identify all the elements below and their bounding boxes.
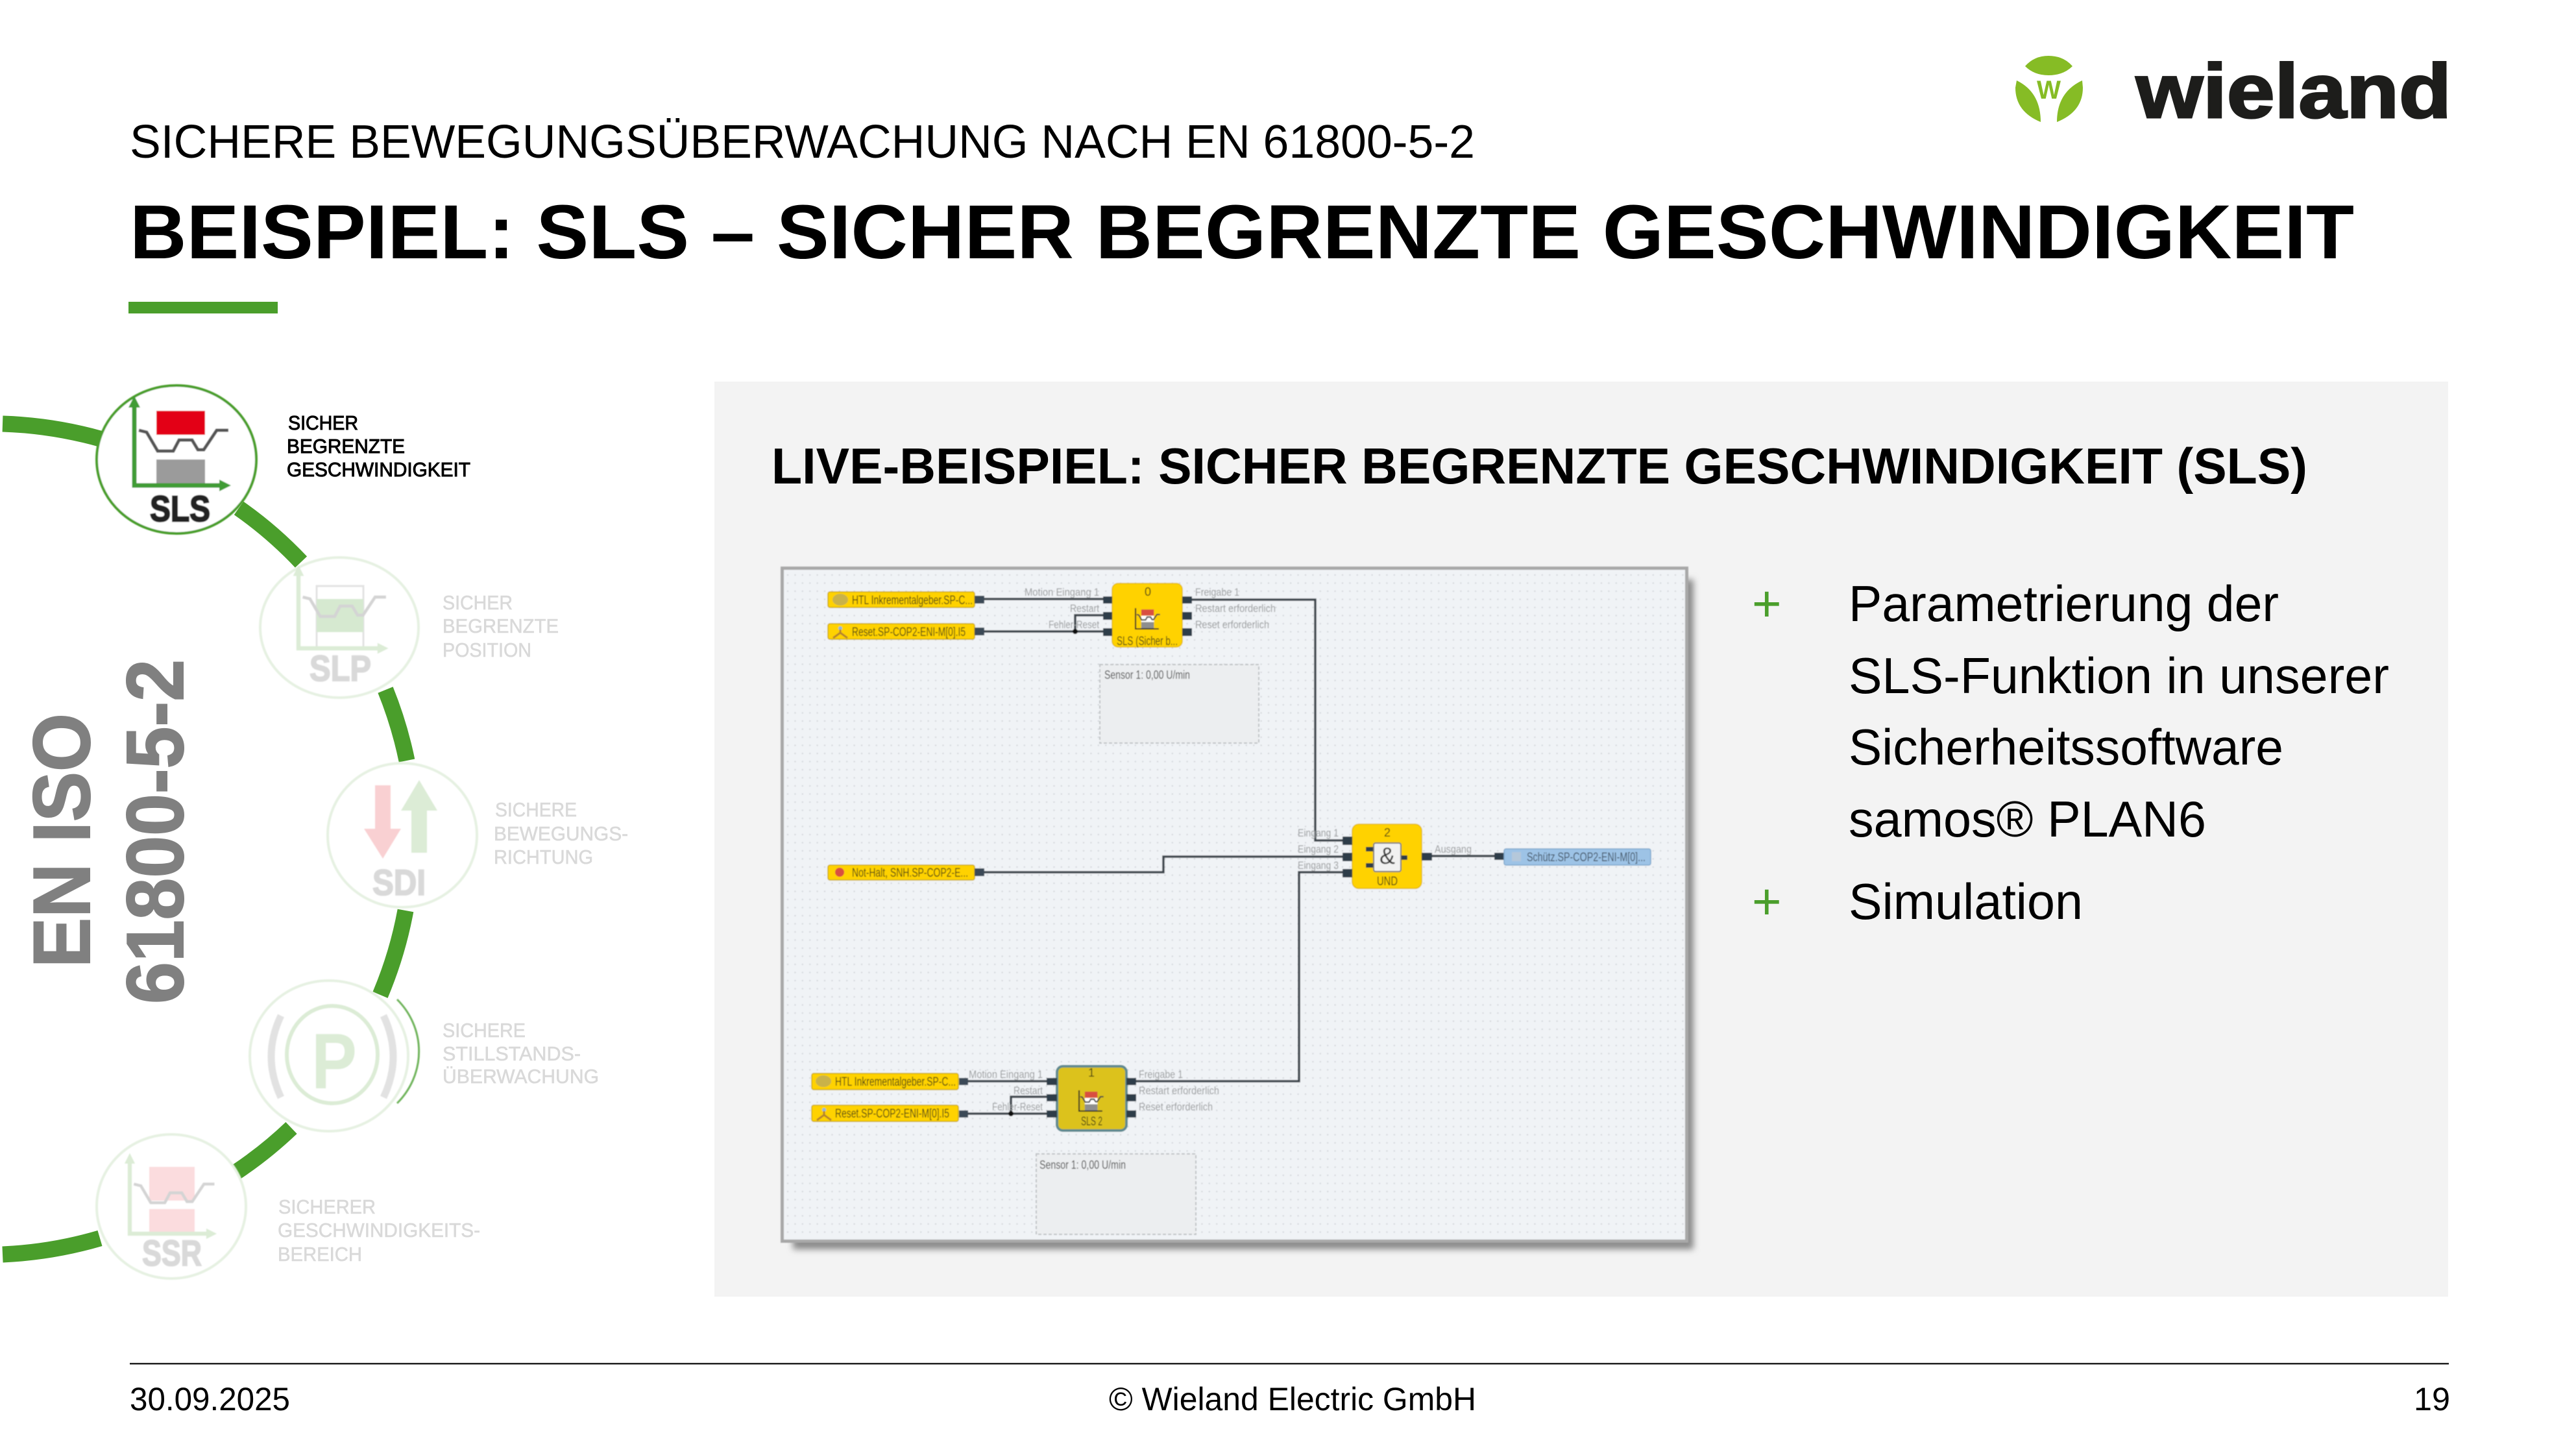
bullet marker: parametrization: +	[1752, 575, 1782, 632]
block 1 port labels	[969, 1068, 1219, 1113]
block 0 port labels	[1025, 586, 1276, 631]
label: SLP: BEGRENZTE	[443, 615, 559, 637]
bullet: parametrization: Parametrierung der	[1849, 575, 2279, 632]
block 2: UND	[1343, 824, 1432, 888]
block 1 port labels: Fehler-Reset	[992, 1101, 1043, 1113]
icon: SDI: SDI	[372, 862, 426, 903]
output: contactor	[1494, 849, 1651, 865]
block 0 port labels: Freigabe 1	[1195, 586, 1239, 598]
input: reset 2: Reset.SP-COP2-ENI-M[0].I5	[835, 1107, 949, 1121]
label: SLS: SICHER	[288, 411, 358, 434]
vertical label: 61800-5-2: 61800-5-2	[111, 659, 200, 1004]
input: HTL encoder 1	[828, 592, 984, 607]
icon: parking brake	[250, 981, 419, 1131]
block 0 port labels: Motion Eingang 1	[1025, 586, 1099, 598]
block 1 port labels: Motion Eingang 1	[969, 1068, 1043, 1081]
footer: date: 30.09.2025	[130, 1381, 290, 1417]
wire junctions	[1008, 629, 1078, 1116]
icon: SLS	[97, 385, 256, 533]
icon: SLS: SLS	[150, 488, 210, 529]
block 0: SLS: SLS (Sicher b...	[1117, 635, 1178, 648]
block 1: SLS 2: 1	[1088, 1066, 1095, 1079]
bullet: parametrization: SLS-Funktion in unserer	[1849, 647, 2389, 704]
block 1 port labels: Restart erforderlich	[1139, 1084, 1219, 1097]
input: reset 2	[812, 1105, 968, 1121]
block 1 port labels: Freigabe 1	[1139, 1068, 1183, 1081]
wordmark: wieland	[2135, 49, 2451, 134]
input: HTL encoder 1: HTL Inkrementalgeber.SP-C...	[852, 594, 973, 607]
block 2 port labels	[1298, 827, 1472, 872]
label: SSR: GESCHWINDIGKEITS-	[278, 1219, 480, 1241]
panel: live example	[714, 382, 2448, 1297]
label: SDI: BEWEGUNGS-	[494, 822, 628, 845]
input: HTL encoder 2: HTL Inkrementalgeber.SP-C...	[835, 1075, 956, 1089]
block 0 port labels: Reset erforderlich	[1195, 618, 1269, 631]
block 0 port labels: Fehler-Reset	[1049, 618, 1099, 631]
label: SDI	[494, 798, 628, 868]
block 2: UND: &	[1379, 842, 1395, 869]
icon: Wieland leaves	[2015, 56, 2083, 122]
subtitle: SICHERE BEWEGUNGSÜBERWACHUNG NACH EN 61800-5-2	[130, 116, 1475, 168]
bullet: parametrization	[1849, 575, 2389, 848]
label: parking: SICHERE	[443, 1019, 526, 1042]
label: SSR: BEREICH	[278, 1243, 362, 1266]
screenshot: safety logic diagram	[783, 569, 1687, 1241]
input: emergency stop	[828, 865, 984, 880]
icon: SSR	[97, 1134, 246, 1278]
icon: Wieland leaves: W	[2037, 76, 2061, 104]
input: reset 1: Reset.SP-COP2-ENI-M[0].I5	[852, 626, 966, 639]
block 2 port labels: Ausgang	[1435, 843, 1472, 855]
icon: SLP	[260, 557, 419, 698]
vertical label: EN ISO: EN ISO	[18, 713, 107, 968]
input: emergency stop: Not-Halt, SNH.SP-COP2-E...	[852, 866, 968, 880]
bullet: parametrization: samos® PLAN6	[1849, 790, 2206, 848]
icon: SDI	[328, 763, 477, 907]
output: contactor: Schütz.SP-COP2-ENI-M[0]...	[1527, 851, 1646, 864]
block 1 port labels: Restart	[1014, 1084, 1043, 1097]
icon: parking brake: P	[311, 1017, 357, 1105]
panel: safety functions arc	[3, 385, 628, 1278]
sensor box: upper: Sensor 1: 0,00 U/min	[1104, 668, 1190, 681]
label: SDI: RICHTUNG	[494, 846, 593, 868]
label: SSR	[278, 1195, 480, 1266]
green arc segments	[3, 424, 407, 1254]
block 0 port labels: Restart erforderlich	[1195, 602, 1276, 615]
input: HTL encoder 2	[812, 1073, 968, 1090]
block 0: SLS: 0	[1145, 585, 1151, 598]
block 2: UND: UND	[1377, 875, 1398, 888]
label: SLS: GESCHWINDIGKEIT	[287, 458, 470, 481]
title: BEISPIEL: SLS – SICHER BEGRENZTE GESCHWINDIGKEIT	[130, 190, 2354, 275]
label: SLP: SICHER	[443, 591, 513, 614]
label: parking	[443, 1019, 599, 1088]
logo: Wieland	[2015, 49, 2451, 134]
block 2 port labels: Eingang 1	[1298, 827, 1339, 839]
block 0: SLS	[1103, 583, 1192, 648]
label: SLS: BEGRENZTE	[287, 435, 405, 458]
sensor box: upper	[1100, 665, 1259, 743]
block 1: SLS 2: SLS 2	[1081, 1115, 1102, 1129]
sensor box: lower	[1036, 1154, 1196, 1234]
icon: SSR: SSR	[142, 1232, 202, 1273]
label: parking: STILLSTANDS-	[443, 1042, 581, 1065]
block 1: SLS 2	[1047, 1066, 1136, 1131]
label: SLP	[443, 591, 559, 661]
bullet marker: simulation: +	[1752, 873, 1782, 930]
screenshot shadow	[793, 580, 1694, 1249]
block 1 port labels: Reset erforderlich	[1139, 1101, 1213, 1113]
bullet: simulation: Simulation	[1849, 873, 2083, 930]
label: SLP: POSITION	[443, 639, 531, 661]
title accent bar	[128, 302, 278, 313]
footer: copyright: © Wieland Electric GmbH	[1109, 1381, 1476, 1417]
icon: SLP: SLP	[310, 648, 371, 689]
panel heading: LIVE-BEISPIEL: SICHER BEGRENZTE GESCHWINDIGKEIT (SLS)	[772, 437, 2307, 495]
label: parking: ÜBERWACHUNG	[443, 1065, 599, 1088]
footer	[130, 1363, 2450, 1417]
label: SLS	[287, 411, 470, 481]
bullet list	[1752, 575, 2389, 930]
footer: page number: 19	[2414, 1381, 2450, 1417]
block 0 port labels: Restart	[1070, 602, 1099, 615]
block 2 port labels: Eingang 3	[1298, 859, 1339, 872]
block 2: UND: 2	[1384, 826, 1391, 839]
input: reset 1	[828, 624, 984, 639]
wires	[968, 599, 1494, 1114]
label: SDI: SICHERE	[495, 798, 577, 821]
bullet: parametrization: Sicherheitssoftware	[1849, 718, 2283, 776]
label: SSR: SICHERER	[278, 1195, 376, 1218]
sensor box: lower: Sensor 1: 0,00 U/min	[1039, 1158, 1126, 1171]
block 2 port labels: Eingang 2	[1298, 843, 1339, 855]
